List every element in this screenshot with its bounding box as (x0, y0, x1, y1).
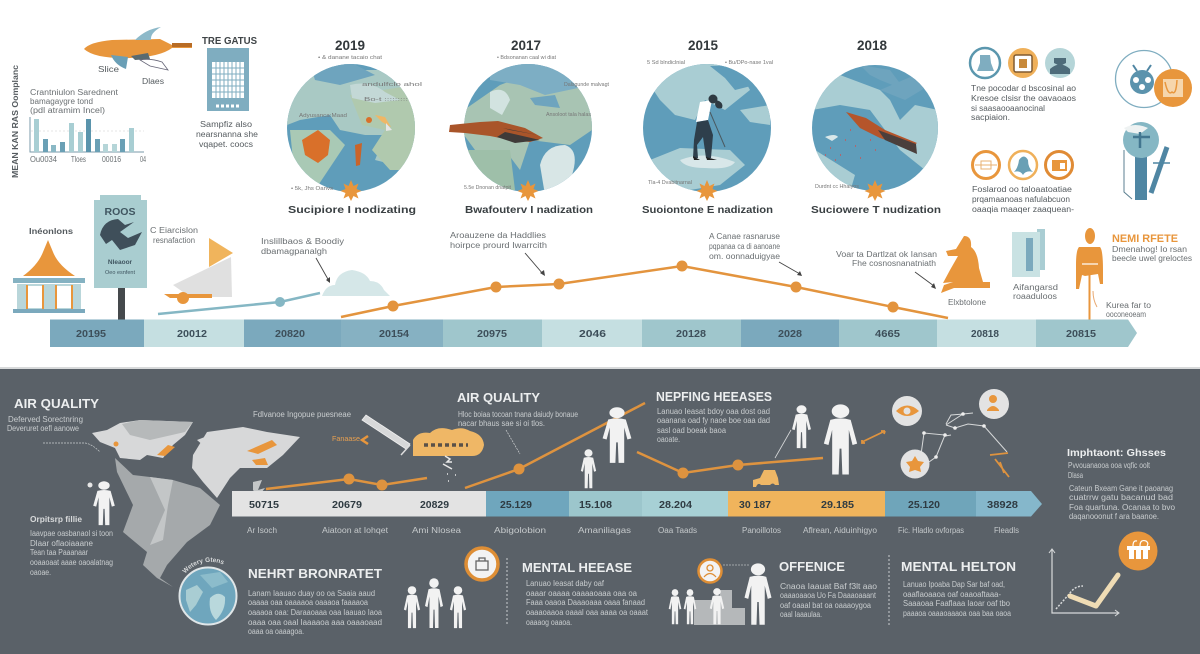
annotation: hospital research: Aroauzene da Haddlies (450, 231, 546, 240)
note: kurea far to: Kurea far to (1106, 301, 1152, 310)
left note block: Iaavpae oasbanaol si toon (30, 529, 113, 538)
icon: orange fish aircraft (84, 27, 192, 70)
timeline ribbon: bottom: 29.185 (821, 499, 854, 511)
mental helton caption: Lanuao Ipoaba Dap Sar baf oad, (903, 580, 1005, 589)
timeline ribbon: top: 20154 (379, 328, 409, 340)
globe: 2017 (449, 55, 609, 201)
annotation: a course: om. oonnaduigyae (709, 252, 781, 261)
annotation: voar ta dartizat: Fhe cosnosnanatniath (852, 259, 936, 268)
globe: 2015: Tla-4 Dvabitnarnal (648, 180, 692, 186)
left note block: Dlaar oflaoiaaane (30, 539, 94, 548)
ribbon sublabels: Amaniliagas (578, 526, 631, 535)
icon: sitting figure (941, 236, 990, 293)
globe: 2017: Ansoloot tala halas (546, 112, 591, 118)
note: kurea far to (1106, 301, 1152, 319)
label: map top note: Fdlvanoe Ingopue puesneae (253, 410, 352, 419)
mental helton caption: oaaflaoaaoa oaf oaaoaftaaa- (903, 590, 1001, 599)
mental heease caption: oaaaoaaoa oaaal oaa aaaa oa oaaat (526, 608, 649, 617)
icon: sail (164, 238, 233, 304)
timeline ribbon: bottom (232, 491, 1042, 516)
bar chart text (30, 88, 119, 115)
icon: orange person (1076, 228, 1103, 322)
callout: next rate (1112, 233, 1192, 263)
network: constellation icons (892, 389, 1009, 478)
globe: 2019: andulfclo ahol (362, 82, 422, 88)
trend line: blue (158, 293, 320, 314)
next bronratet caption: oaaa oa oaaagoa. (248, 627, 304, 636)
left note block: ooaaoaat aaae oaoalatnag (30, 558, 113, 567)
left note block (30, 514, 113, 577)
text block: row one caption: Tne pocodar d bscosinal ao (971, 84, 1077, 93)
annotation: hospital research: hoirpce prourd Iwarrcith (450, 241, 547, 250)
timeline ribbon: top: 20012 (177, 328, 207, 340)
ribbon sublabels: Oaa Taads (658, 526, 697, 535)
label: slice: Slice (98, 65, 120, 74)
trend lines: bottom (266, 403, 823, 490)
mental heease caption (526, 579, 649, 627)
icon: orange ring badge (466, 548, 498, 580)
icon: virus and orange badge (1116, 50, 1192, 108)
air quality caption: Deferved Sorectnring (8, 415, 83, 424)
panel: top timeline section (11, 27, 1192, 347)
chart axis labels: 04 (140, 155, 146, 164)
heading: air quality left: AIR QUALITY (14, 396, 99, 411)
timeline ribbon: top: 20975 (477, 328, 507, 340)
tablet caption (196, 120, 259, 149)
text block: row one caption: Kresoe clsisr the oavaoaos (971, 94, 1076, 103)
air quality middle caption: Hloc boiaa tocoan tnana daiudy bonaue (458, 410, 578, 419)
mental helton caption: paaaoa oaaaoaaaoa oaa baa oaoa (903, 609, 1011, 618)
left note block: oaoae. (30, 568, 51, 577)
globe title: 2018: Suciowere T nudization (811, 204, 941, 216)
ribbon sublabels: Panoillotos (742, 526, 781, 535)
tablet caption: vqapet. coocs (199, 140, 253, 149)
figure: person right (775, 405, 811, 458)
next bronratet caption (248, 589, 382, 636)
offenice caption: oaf oaaal bat oa oaaaoygoa (780, 601, 872, 610)
important classes caption: Pvvouanaooa ooa vqfic oolt (1068, 461, 1151, 470)
year: 2015: 2015 (688, 38, 719, 53)
figure: tall person on line (603, 407, 631, 463)
annotation: buildings and bodily: dbamagpanalgh (261, 247, 327, 256)
globe: 2017: Dalsgunde malvagt (564, 82, 609, 88)
globe: 2019 (287, 55, 422, 201)
timeline ribbon: top: 2028 (778, 328, 802, 340)
globe: 2019: • 5k, Jhs Oanvs (291, 186, 333, 192)
year: 2017: 2017 (511, 38, 541, 53)
globe: 2017: • Bdsonanan caal wi diat (497, 55, 556, 61)
important classes caption: cuatrrw gatu bacanud bad (1069, 493, 1173, 502)
timeline ribbon: bottom: 50715 (249, 499, 279, 511)
bar chart text: Crantniulon Sarednent (30, 88, 119, 97)
annotation: buildings and bodily (261, 237, 344, 283)
offenice caption: oaal Iaaaulaa. (780, 610, 822, 619)
ribbon sublabels: Aiatoon at Iohqet (322, 526, 389, 535)
icon: book (1012, 229, 1045, 277)
heading: mental helton: MENTAL HELTON (901, 559, 1016, 574)
nepfing caption: Lanuao Ieasat bdoy oaa dost oad (657, 407, 770, 416)
ribbon sublabels: Fleadls (994, 526, 1019, 535)
text block: row two caption: prqamaanoas nafulabcuon (972, 195, 1070, 204)
nepfing caption: oaoate. (657, 435, 680, 444)
text block: row one caption (971, 84, 1077, 122)
ribbon sublabels: Aflrean, Aiduinhigyo (803, 526, 878, 535)
timeline ribbon: bottom: 20679 (332, 499, 362, 511)
ribbon sublabels (247, 526, 1019, 535)
important classes caption: Cateun Bxeam Gane it paoanag (1069, 484, 1173, 493)
globe title: 2017: Bwafouterv I nadization (465, 204, 593, 216)
icon: orange cloud (413, 428, 484, 481)
air quality caption (7, 415, 100, 452)
label: elections: Elxbtolone (948, 298, 987, 307)
annotation: environmental reduction (150, 226, 198, 245)
label: orange tag: Fanaase (332, 434, 360, 443)
book caption: roaaduloos (1013, 292, 1057, 301)
chart axis labels: Tloes (71, 155, 86, 164)
timeline ribbon: top: 4665 (875, 328, 900, 340)
icon: tablet grid (207, 48, 249, 111)
heading: air quality middle: AIR QUALITY (457, 390, 540, 405)
text block: row two caption: Foslarod oo taloaatoatiae (972, 185, 1073, 194)
icon: orange person badge (698, 560, 749, 582)
mental heease caption: oaaaog oaaoa. (526, 618, 572, 627)
mental helton caption (903, 580, 1011, 618)
text block: row two caption (972, 185, 1074, 214)
offenice caption: oaaaoaaoa Uo Fa Daaaoaaant (780, 591, 877, 600)
timeline ribbon: top: 20820 (275, 328, 305, 340)
timeline ribbon: top: 20815 (1066, 328, 1096, 340)
chart axis labels: Ou0034 (30, 155, 58, 164)
heading: next bronratet: NEHRT BRONRATET (248, 566, 382, 581)
world map (92, 420, 300, 587)
nepfing caption: sasl oad boeak baoa (657, 426, 727, 435)
timeline ribbon: top: 20195 (76, 328, 106, 340)
figure: person with ball (88, 481, 115, 525)
trend line: orange (341, 260, 948, 318)
tablet caption: nearsnanna she (196, 130, 259, 139)
figures: three people (404, 578, 466, 628)
tablet caption: Sampfiz also (200, 120, 253, 129)
annotation: voar ta dartizat: Voar ta Dartlzat ok Iansan (836, 250, 937, 259)
line chart icon (1049, 532, 1158, 616)
offenice caption (780, 582, 878, 619)
label: dlaes: Dlaes (142, 77, 164, 86)
timeline ribbon: bottom: 15.108 (579, 499, 612, 511)
globe: 2019: Bo-t ::::::::: (364, 97, 409, 103)
text block: row one caption: si saasaooaanocinal (971, 104, 1045, 113)
bar chart text: (pdl atramim Incel) (30, 106, 105, 115)
next bronratet caption: oaaaa oaa oaaaaoa oaaaoa faaaaoa (248, 598, 368, 607)
heading: the status: TRE GATUS (202, 35, 257, 47)
next bronratet caption: oaaa oaa oaal Iaaaaoa aaa oaaaoaad (248, 618, 382, 627)
annotation: buildings and bodily: Inslillbaos & Boodiy (261, 237, 344, 246)
ribbon sublabels: Fic. Hladlo ovforpas (898, 526, 964, 535)
globe: 2019: Adyusanca:Maad (299, 113, 347, 119)
globe: 2017: 5.5e Dnonan dnatpit (464, 185, 511, 191)
dashed vertical arrow (506, 558, 508, 626)
small globe: Wetery Gtens (182, 557, 224, 573)
next bronratet caption: Lanam Iaauao duay oo oa Saaia aaud (248, 589, 375, 598)
globe: 2015 (643, 60, 773, 201)
annotation: a course: pqpanaa ca di aanoane (709, 242, 780, 251)
heading: mental heease: MENTAL HEEASE (522, 560, 632, 575)
figures: podium group (669, 563, 772, 625)
rotated side label: MEAN KAN RAS Oomplanc (11, 64, 20, 178)
icon row one (970, 48, 1075, 78)
signboard (94, 195, 147, 332)
figure: big person (824, 404, 857, 475)
figure: small person (581, 449, 596, 488)
mental heease caption: Faaa oaaoa Daaaoaaa oaaa fanaad (526, 598, 645, 607)
mental heease caption: oaaar oaaaa oaaaaoaaa oaa oa (526, 589, 638, 598)
globe: 2018: Durdnt cc Hhaiyos (815, 184, 859, 190)
globe: 2018 (812, 65, 938, 201)
timeline ribbon: top: 20128 (676, 328, 706, 340)
label: inventions: Inéonlons (29, 227, 74, 236)
air quality caption: Deveruret oefl aanowe (7, 424, 79, 433)
callout: next rate: NEMI RFETE (1112, 233, 1178, 245)
callout: next rate: beecle uwel greloctes (1112, 254, 1192, 263)
annotation: environmental reduction: C Eiarcislon (150, 226, 198, 235)
important classes caption: daqanooonut f ara baanoe. (1069, 512, 1159, 521)
icon: car (753, 470, 779, 487)
timeline ribbon: top: 20818 (971, 328, 999, 340)
note: kurea far to: ooconeoeam (1106, 310, 1146, 319)
year: 2018: 2018 (857, 38, 888, 53)
left note block: Orpitsrp fillie (30, 514, 82, 524)
signboard: ROOS (105, 206, 135, 218)
globe: 2015: • Bu/DPo-nase 1val (725, 60, 773, 66)
timeline ribbon: bottom: 25.129 (500, 499, 532, 511)
timeline ribbon: bottom: 20829 (420, 499, 449, 511)
bar chart (30, 117, 144, 152)
icon row two (972, 151, 1072, 179)
offenice caption: Cnaoa Iaauat Baf f3lt aao (780, 582, 878, 591)
annotation: environmental reduction: resnafaction (153, 236, 195, 245)
next bronratet caption: oaaaoa oaa: Daraaoaaa oaa Iaauao Iaoa (248, 608, 382, 617)
text block: row one caption: sacpiaion. (971, 113, 1010, 122)
mental helton caption: Saaaoaa Faaflaaa Iaoar oaf tbo (903, 599, 1011, 608)
text block: row two caption: oaaqia maaqer zaaquean- (972, 205, 1074, 214)
air quality middle caption: nacar bhaus sae si oi tlos. (458, 419, 545, 428)
timeline ribbon: bottom: 28.204 (659, 499, 692, 511)
small globe (178, 557, 238, 626)
callout: next rate: Dmenahog! Io rsan (1112, 245, 1187, 254)
icon: double arrow (862, 431, 885, 443)
icon: syringe (362, 415, 410, 455)
annotation: a course (709, 232, 802, 276)
globe: 2015: 5 Sd blndiclnial (647, 60, 685, 66)
globe title: 2019: Sucipiore I nodizating (288, 204, 416, 216)
air quality middle caption (458, 410, 578, 454)
panel: bottom dark section (0, 367, 1200, 654)
important classes caption: Dlasa (1068, 471, 1083, 480)
timeline ribbon: top (50, 320, 1137, 347)
book caption (1013, 283, 1058, 301)
nepfing caption (657, 407, 770, 444)
chart axis labels: 00016 (102, 155, 121, 164)
left note block: Tean taa Paaanaar (30, 548, 88, 557)
ribbon sublabels: Ami Nlosea (412, 526, 462, 535)
annotation: voar ta dartizat (836, 250, 937, 289)
book caption: Aifangarsd (1013, 283, 1058, 292)
chart axis labels (30, 155, 146, 164)
timeline ribbon: bottom: 38928 (987, 499, 1018, 511)
icon: key and tool (1123, 122, 1170, 200)
ribbon sublabels: Ar Isoch (247, 526, 277, 535)
heading: nepfing heeases: NEPFING HEEASES (656, 389, 772, 404)
signboard: Nleaoor (108, 259, 133, 266)
dashed divider arrow (888, 555, 890, 625)
globe title: 2015: Suoiontone E nadization (642, 204, 773, 216)
mental heease caption: Lanuao Ieasat daby oaf (526, 579, 605, 588)
bar chart text: bamagaygre tond (30, 97, 93, 106)
icon: cloud (322, 270, 390, 296)
timeline ribbon: bottom: 30 187 (739, 499, 771, 511)
important classes caption (1068, 461, 1176, 521)
icon: temple (13, 240, 85, 313)
annotation: a course: A Canae rasnaruse (709, 232, 781, 241)
ribbon sublabels: Abigolobion (494, 526, 546, 535)
signboard: Oeo esnfent (105, 270, 135, 276)
nepfing caption: oaanana oad fy naoe boe oaa dad (657, 416, 770, 425)
timeline ribbon: bottom: 25.120 (908, 499, 940, 511)
globe: 2019: • & danane tacaio chat (318, 55, 383, 61)
heading: important classes: Imphtaont: Ghsses (1067, 447, 1166, 459)
timeline ribbon: top: 2046 (579, 328, 606, 340)
year: 2019: 2019 (335, 38, 365, 53)
important classes caption: Foa quartuna. Ocanaa to bvo (1069, 503, 1176, 512)
annotation: hospital research (450, 231, 547, 276)
heading: offenice: OFFENICE (779, 559, 845, 574)
